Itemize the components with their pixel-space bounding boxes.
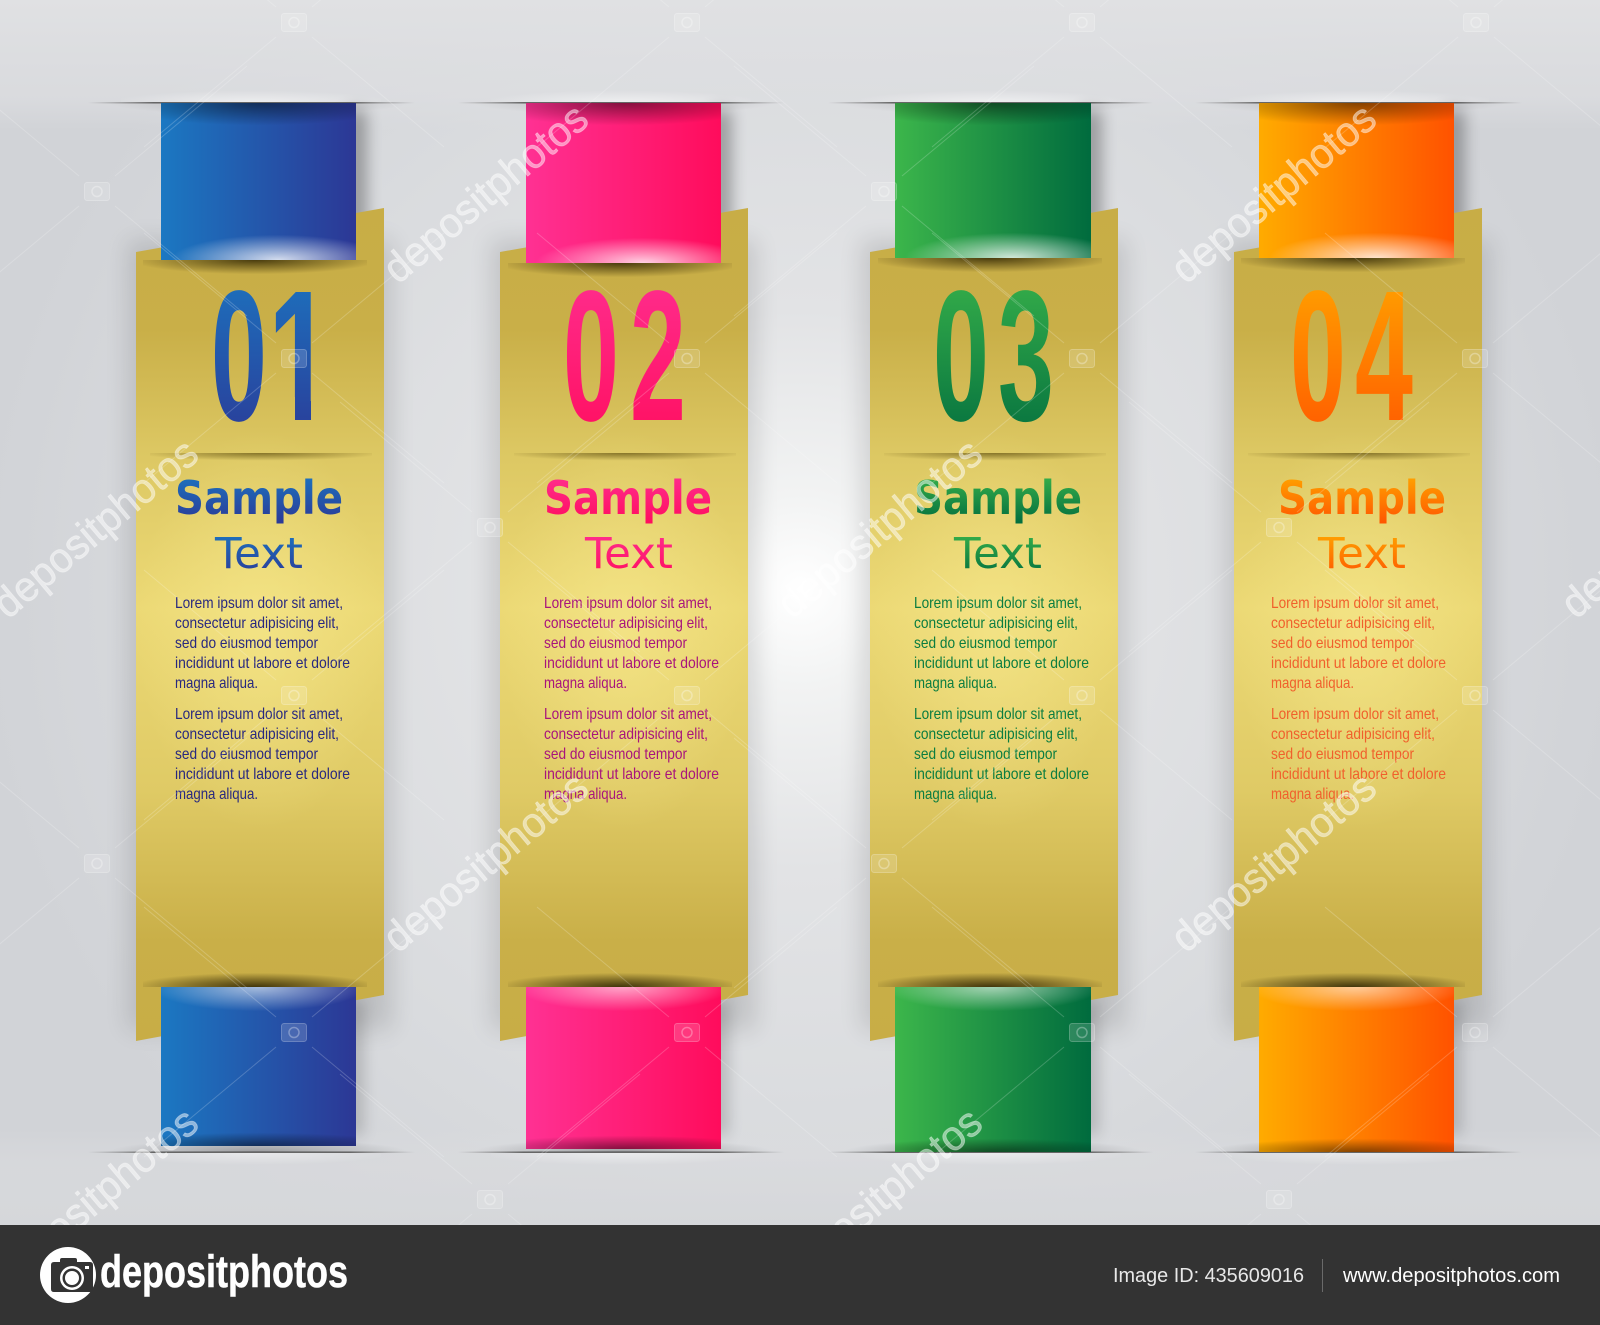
body text 02: Lorem ipsum dolor sit amet,	[544, 706, 712, 723]
body text 04: incididunt ut labore et dolore	[1271, 655, 1446, 672]
gold ribbon 01	[136, 208, 384, 1041]
number 03	[933, 252, 1054, 460]
bottom tab 01	[161, 987, 356, 1146]
number 03: 3	[998, 252, 1054, 460]
brand name: depositphotos	[100, 1246, 348, 1297]
heading 02: Text	[584, 529, 673, 579]
body text 03: magna aliqua.	[914, 786, 997, 803]
top tab 02	[526, 103, 721, 263]
body text 01: incididunt ut labore et dolore	[175, 766, 350, 783]
heading 01: Sample	[175, 471, 343, 525]
body text 01: sed do eiusmod tempor	[175, 635, 319, 652]
heading 02	[544, 471, 712, 579]
body text 01: Lorem ipsum dolor sit amet,	[175, 706, 343, 723]
number 04: 4	[1355, 252, 1413, 459]
number 04: 0	[1290, 252, 1346, 460]
heading 03: Text	[953, 529, 1042, 579]
body text 03	[914, 595, 1089, 803]
number 03: 0	[933, 252, 989, 460]
body text 03: Lorem ipsum dolor sit amet,	[914, 706, 1082, 723]
body text 01: magna aliqua.	[175, 675, 258, 692]
body text 02	[544, 595, 719, 803]
body text 04: magna aliqua.	[1271, 786, 1354, 803]
heading 01	[175, 471, 343, 579]
number 02: 0	[563, 252, 619, 460]
body text 03: magna aliqua.	[914, 675, 997, 692]
gold ribbon 02	[500, 208, 748, 1041]
watermark text: depositphotos	[768, 1098, 991, 1296]
website url: www.depositphotos.com	[1342, 1264, 1560, 1287]
body text 04: incididunt ut labore et dolore	[1271, 766, 1446, 783]
body text 04: sed do eiusmod tempor	[1271, 746, 1415, 763]
body text 01: sed do eiusmod tempor	[175, 746, 319, 763]
heading 03	[914, 471, 1082, 579]
body text 01: magna aliqua.	[175, 786, 258, 803]
body text 03: Lorem ipsum dolor sit amet,	[914, 595, 1082, 612]
bottom tab 02	[526, 987, 721, 1149]
number 02	[563, 252, 686, 460]
number 04	[1290, 252, 1413, 460]
top tab 03	[895, 103, 1091, 258]
body text 04: consectetur adipisicing elit,	[1271, 615, 1435, 632]
image id: Image ID: 435609016	[1113, 1265, 1304, 1287]
gold ribbon 04	[1234, 208, 1482, 1041]
panel: banner 01 blue	[128, 103, 392, 1146]
body text 02: Lorem ipsum dolor sit amet,	[544, 595, 712, 612]
watermark text: depositphotos	[374, 94, 597, 292]
body text 03: sed do eiusmod tempor	[914, 746, 1058, 763]
body text 02: incididunt ut labore et dolore	[544, 766, 719, 783]
watermark text: depositphotos	[1162, 763, 1385, 961]
divider	[1322, 1259, 1323, 1292]
body text 02: incididunt ut labore et dolore	[544, 655, 719, 672]
body text 02: magna aliqua.	[544, 786, 627, 803]
body text 04: magna aliqua.	[1271, 675, 1354, 692]
heading 01: Text	[214, 529, 303, 579]
body text 04: consectetur adipisicing elit,	[1271, 726, 1435, 743]
bottom tab 04	[1259, 987, 1454, 1152]
body text 02: sed do eiusmod tempor	[544, 746, 688, 763]
body text 01: consectetur adipisicing elit,	[175, 615, 339, 632]
body text 01: Lorem ipsum dolor sit amet,	[175, 595, 343, 612]
top tab 01	[161, 103, 356, 260]
number 02: 2	[630, 252, 686, 460]
body text 01	[175, 595, 350, 803]
body text 02: sed do eiusmod tempor	[544, 635, 688, 652]
number 01: 1	[268, 252, 332, 460]
heading 04: Text	[1317, 529, 1406, 579]
panel: banner 02 pink	[492, 103, 756, 1149]
body text 03: incididunt ut labore et dolore	[914, 766, 1089, 783]
icon: camera logo	[40, 1247, 96, 1303]
number 01: 0	[211, 252, 267, 460]
body text 04: Lorem ipsum dolor sit amet,	[1271, 706, 1439, 723]
panel: banner 04 orange	[1226, 103, 1490, 1152]
body text 03: consectetur adipisicing elit,	[914, 615, 1078, 632]
body text 04: sed do eiusmod tempor	[1271, 635, 1415, 652]
body text 02: consectetur adipisicing elit,	[544, 615, 708, 632]
heading 04	[1278, 471, 1446, 579]
footer bar	[0, 1225, 1600, 1325]
body text 02: magna aliqua.	[544, 675, 627, 692]
body text 02: consectetur adipisicing elit,	[544, 726, 708, 743]
heading 03: Sample	[914, 471, 1082, 525]
body text 03: consectetur adipisicing elit,	[914, 726, 1078, 743]
watermark text: depositphotos	[768, 429, 991, 627]
heading 04: Sample	[1278, 471, 1446, 525]
body text 04	[1271, 595, 1446, 803]
watermark text: depositphotos	[1162, 94, 1385, 292]
watermark text: depositphotos	[374, 763, 597, 961]
bottom tab 03	[895, 987, 1091, 1152]
number 01	[214, 290, 311, 422]
body text 01: incididunt ut labore et dolore	[175, 655, 350, 672]
body text 01: consectetur adipisicing elit,	[175, 726, 339, 743]
gold ribbon 03	[870, 208, 1118, 1041]
body text 04: Lorem ipsum dolor sit amet,	[1271, 595, 1439, 612]
body text 03: incididunt ut labore et dolore	[914, 655, 1089, 672]
heading 02: Sample	[544, 471, 712, 525]
top tab 04	[1259, 103, 1454, 258]
panel: banner 03 green	[862, 103, 1126, 1152]
body text 03: sed do eiusmod tempor	[914, 635, 1058, 652]
